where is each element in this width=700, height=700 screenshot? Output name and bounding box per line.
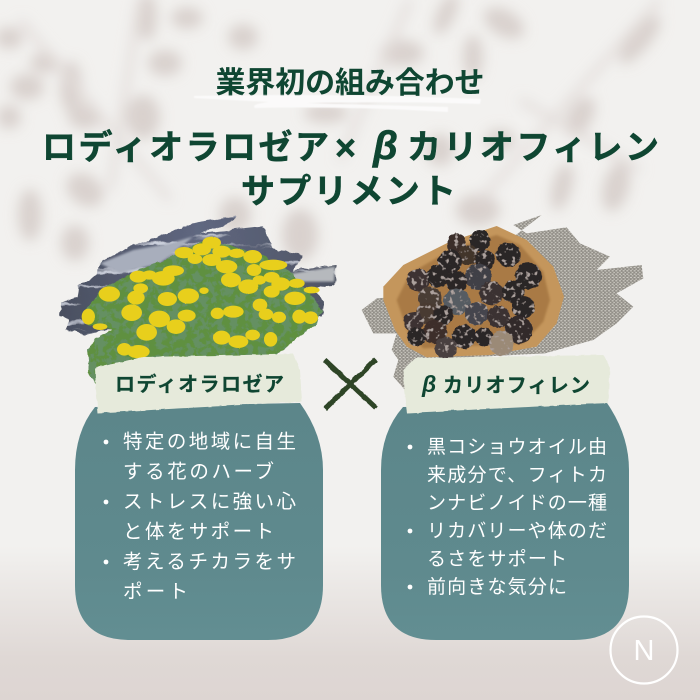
bullet list: ポート: [123, 581, 188, 603]
rock backdrop: [60, 215, 337, 335]
small heading: [194, 67, 484, 112]
foliage: [83, 239, 323, 387]
heading brush underline: [194, 95, 481, 112]
main title: β: [372, 124, 398, 168]
label: beta-caryophyllene: カリオフィレン: [443, 375, 590, 397]
label: beta-caryophyllene: β: [421, 371, 436, 397]
small heading: 業界初の組み合わせ: [216, 67, 484, 100]
logo: N badge: [610, 616, 678, 684]
bullet list: 黒コショウオイル由: [427, 436, 607, 458]
bullet list: 来成分で、フィトカ: [427, 464, 607, 486]
main title: ×: [335, 127, 356, 168]
main title: [42, 124, 659, 211]
panel: beta-caryophyllene: [381, 355, 629, 640]
bullet list: ンナビノイドの一種: [427, 492, 607, 514]
yellow flower heads: [82, 237, 320, 358]
wooden bowl: [383, 226, 564, 357]
panel background: [75, 403, 323, 640]
label: rhodiola: [95, 354, 302, 413]
bullet list: 特定の地域に自生: [123, 431, 296, 453]
bullet list: [408, 436, 607, 598]
panel: rhodiola: [75, 354, 323, 640]
main title: カリオフィレン: [407, 129, 659, 167]
photo: black pepper bowl: [362, 215, 643, 390]
main title: サプリメント: [241, 173, 456, 211]
bullet list: リカバリーや体のだ: [427, 520, 607, 542]
blurred leaf shadows: [0, 0, 667, 261]
burlap backdrop: [362, 215, 643, 390]
multiply sign: [327, 361, 374, 407]
panel background: [381, 403, 629, 640]
bullet list: るさをサポート: [427, 548, 567, 570]
label: beta-caryophyllene: [403, 355, 610, 413]
bullet list: 前向きな気分に: [427, 576, 567, 598]
bullet list: 考えるチカラをサ: [123, 551, 296, 573]
bullet list: ストレスに強い心: [123, 491, 296, 513]
bullet list: [104, 431, 296, 603]
label: rhodiola: ロディオラロゼア: [115, 372, 284, 396]
bullet list: と体をサポート: [123, 521, 274, 543]
logo: N badge: N: [634, 635, 654, 667]
main title: ロディオラロゼア: [42, 128, 329, 167]
peppercorns: [403, 230, 542, 360]
photo: rhodiola flowers: [60, 215, 337, 387]
bullet list: する花のハーブ: [123, 460, 274, 483]
